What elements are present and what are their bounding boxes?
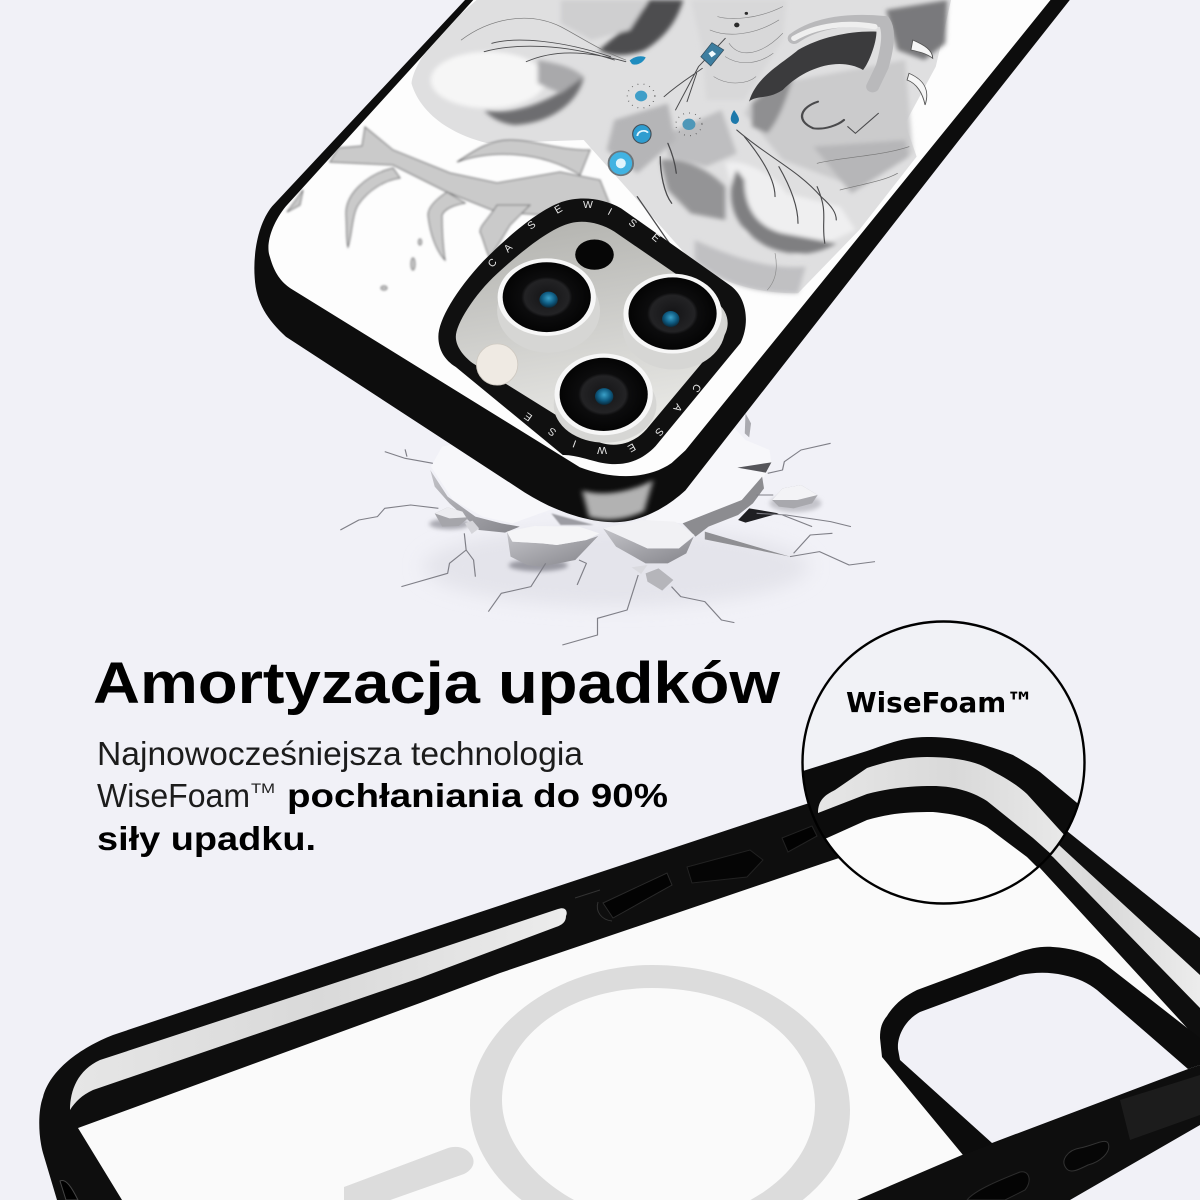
alignment pill (344, 1147, 474, 1200)
elephant dark inner ear (749, 32, 876, 102)
camera plate (456, 222, 728, 445)
CASEWISE ring text top: CASEWISE (486, 199, 662, 270)
cracked wall impact (340, 413, 875, 645)
body text (97, 735, 668, 857)
microphone hole (575, 239, 614, 270)
lower clear case (39, 756, 1200, 1200)
elephant body mass (411, 0, 951, 293)
body text: siły upadku. (97, 820, 316, 857)
camera cutout opening (898, 973, 1188, 1143)
label WiseFoam: WiseFoam™ (846, 686, 1034, 719)
WiseFoam magnifier circle (801, 620, 1086, 905)
circle outline (802, 622, 1084, 904)
lens: upper left (497, 258, 600, 353)
elephant line work (461, 7, 909, 290)
camera cutout frame (880, 947, 1200, 1155)
clear back panel (78, 821, 1200, 1200)
MagSafe ring (470, 965, 850, 1200)
side buttons (575, 826, 817, 921)
phone black bumper (254, 0, 1070, 522)
elephant root branches (287, 127, 620, 290)
magnified corner of bumper (804, 737, 1078, 902)
elephant illustration (287, 0, 951, 293)
camera island black frame (438, 198, 746, 464)
body text: WiseFoam (97, 777, 250, 814)
body text: TM (251, 780, 275, 796)
blue gem accents (609, 12, 748, 175)
lens: right (623, 274, 725, 370)
right bumper strip (1000, 795, 1200, 1008)
left bumper strip (70, 908, 567, 1110)
body text: pochłaniania do 90% (287, 777, 668, 814)
lens: bottom (554, 354, 656, 443)
case black frame (39, 756, 1200, 1200)
white case back (268, 0, 1050, 476)
elephant tusk arc (794, 21, 888, 87)
top phone with case (254, 0, 1070, 522)
heading: Amortyzacja upadków (93, 651, 781, 716)
bottom port details (60, 1075, 1200, 1200)
body text: Najnowocześniejsza technologia (97, 735, 584, 772)
flash (476, 344, 518, 385)
CASEWISE ring text bottom: CASEWISE (522, 381, 703, 456)
